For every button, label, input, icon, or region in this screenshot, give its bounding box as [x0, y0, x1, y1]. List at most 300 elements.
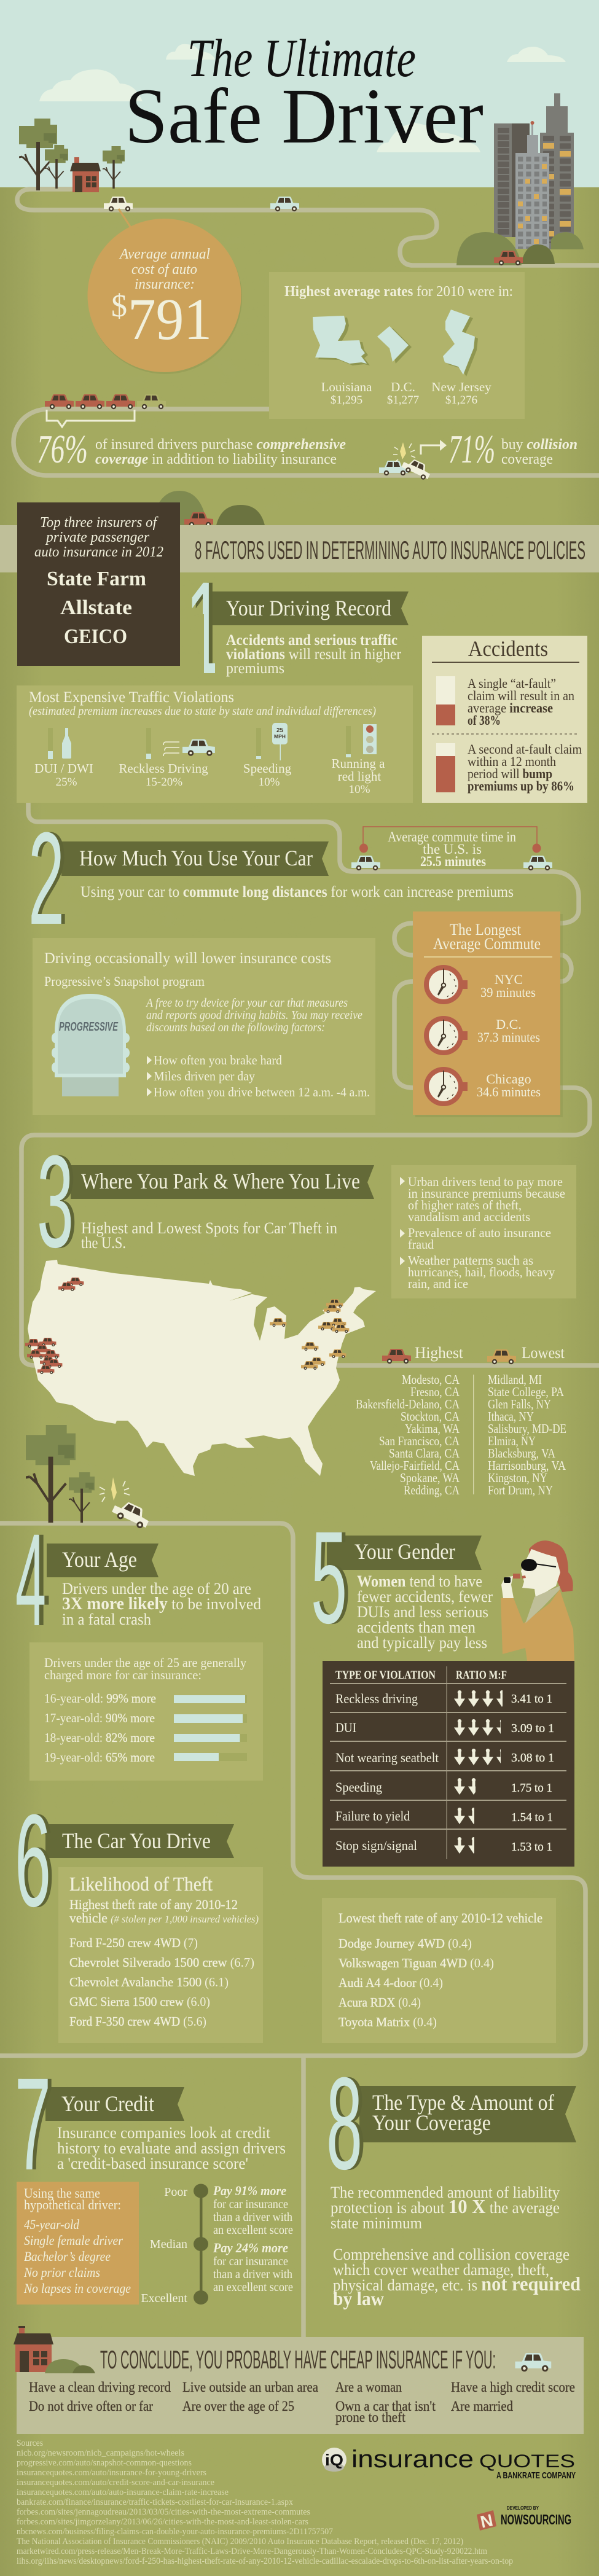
note: poor score — [213, 2183, 293, 2237]
section banner: 8 factors — [0, 525, 599, 572]
list: lowest cities: Salisbury, MD-DE — [488, 1421, 566, 1436]
commute: D.C. — [424, 1016, 540, 1055]
panel: top three insurers: private passenger — [45, 529, 150, 545]
panel: top three insurers: auto insurance in 2012 — [34, 544, 163, 560]
title line: The Ultimate: The Ultimate — [187, 29, 416, 88]
violation: reckless driving — [119, 728, 215, 789]
state labels: Louisiana — [321, 380, 372, 394]
panel: top three insurers: GEICO — [64, 625, 127, 648]
conclusion list: Have a clean driving record — [29, 2379, 171, 2395]
highest theft cars — [25, 1278, 84, 1374]
note: poor score: Pay 91% more — [213, 2183, 286, 2198]
number 3: 3 — [37, 1128, 74, 1275]
list: highest theft vehicles: Chevrolet Avalanche 1500 (6.1) — [69, 1975, 229, 1989]
row: speeding — [335, 1778, 552, 1795]
list: highest cities: Vallejo-Fairfield, CA — [370, 1458, 460, 1473]
note: median score — [213, 2240, 293, 2294]
sources: insurancequotes.com/auto/credit-score-and-car-insurance — [17, 2478, 214, 2488]
list: lowest cities: State College, PA — [488, 1384, 565, 1399]
hills and car behind banner — [151, 491, 265, 528]
panel: hypothetical driver: Single female driver — [24, 2233, 123, 2248]
panel: top three insurers: Allstate — [60, 596, 132, 619]
panel: lowest theft: Lowest theft rate of any 2010-12 vehicle — [339, 1910, 542, 1926]
conclusion list: Own a car that isn't — [335, 2398, 436, 2414]
list: highest cities: Yakima, WA — [405, 1421, 460, 1436]
illustration: woman with lipstick — [501, 1540, 574, 1661]
number 8: 8 — [326, 2050, 362, 2197]
table: violation ratio by gender: TYPE OF VIOLATION — [335, 1669, 436, 1682]
stat: 76 percent comprehensive — [37, 394, 346, 472]
factor 3: where you park — [37, 1128, 374, 1275]
panel: conclusion — [14, 2326, 584, 2434]
logo: nowsourcing: DEVELOPED BY — [507, 2505, 539, 2511]
bar chart rows — [44, 1691, 247, 1765]
accident bar 1: A single “at-fault” — [468, 676, 556, 691]
factor 4: your age: 3X more likely to be involved — [62, 1594, 261, 1614]
panel: most expensive traffic violations: (estimated premium increases due to state by state and individual differences) — [29, 704, 376, 718]
text: comprehensive: which cover weather damage, theft, — [333, 2261, 549, 2279]
row: stop sign: 1.53 to 1 — [511, 1840, 552, 1854]
sources: The National Association of Insurance Commissioners (NAIC) 2009/2010 Auto Insurance Database Report, released (Dec. 17, 2012) — [17, 2537, 463, 2547]
sources: nbcnews.com/business/filing-claims-can-double-your-auto-insurance-premiums-2D11757507 — [17, 2527, 333, 2537]
logo: insurancequotes: iQ — [325, 2451, 343, 2469]
factor 2: how much you use your car: Using your car to commute long distances for work can increase premiums — [80, 884, 514, 900]
factor 5: your gender: DUIs and less serious — [357, 1603, 488, 1621]
note: poor score: for car insurance — [213, 2198, 288, 2211]
table: violation ratio by gender: RATIO M:F — [456, 1669, 507, 1682]
city skyline — [456, 93, 584, 265]
text: driving record — [226, 632, 402, 677]
violation: DUI: 25% — [56, 776, 77, 789]
row: reckless driving: 3.41 to 1 — [511, 1692, 552, 1706]
violation: speeding: Speeding — [243, 761, 292, 776]
commute: NYC — [424, 965, 536, 1004]
text: liability — [331, 2184, 560, 2232]
factor 5: your gender: accidents than men — [357, 1618, 476, 1636]
conclusion list: Are a woman — [335, 2379, 402, 2395]
accident bar 1: of 38% — [468, 712, 501, 728]
banner: where you park — [71, 1165, 374, 1199]
row: stop sign — [335, 1837, 552, 1854]
row: not wearing seatbelt: Not wearing seatbelt — [335, 1750, 439, 1765]
logo: insurancequotes: QUOTES — [479, 2451, 575, 2472]
list: highest cities: Modesto, CA — [402, 1372, 460, 1387]
panel: lowest theft — [322, 1898, 556, 2043]
number 5 — [311, 1504, 351, 1651]
list: lowest theft vehicles — [339, 1936, 494, 2029]
logo: nowsourcing — [477, 2505, 571, 2532]
road: centre dividing road — [0, 1523, 585, 2337]
note: poor score: than a driver with — [213, 2211, 292, 2224]
row: stop sign: Stop sign/signal — [335, 1838, 417, 1853]
factor 2: how much you use your car — [28, 805, 514, 952]
factor list: How often you brake hard — [154, 1053, 282, 1067]
sources: insurancequotes.com/auto/auto-insurance-claim-rate-increase — [17, 2488, 229, 2497]
panel: hypothetical driver — [17, 2182, 139, 2305]
number 3 — [37, 1128, 77, 1275]
factor 5: your gender: fewer accidents, fewer — [357, 1588, 493, 1606]
violation: running a red light: 10% — [349, 783, 370, 796]
number 2 — [28, 805, 68, 952]
icon: car — [515, 2353, 551, 2371]
map: united states with theft markers — [25, 1260, 376, 1476]
list: highest cities: Bakersfield-Delano, CA — [356, 1397, 460, 1411]
banner: your gender: Your Gender — [354, 1539, 455, 1564]
sources — [17, 2438, 513, 2566]
panel: longest average commute: The Longest — [450, 921, 522, 939]
list: lowest theft vehicles: Toyota Matrix (0.4) — [339, 2015, 437, 2029]
list: highest cities — [356, 1372, 460, 1497]
commute: Chicago: Chicago — [486, 1071, 531, 1087]
list: lowest theft vehicles: Acura RDX (0.4) — [339, 1995, 421, 2010]
clouds — [39, 44, 566, 152]
state labels: $1,276 — [445, 394, 477, 407]
number 6 — [15, 1787, 55, 1934]
note: median score: than a driver with — [213, 2268, 292, 2281]
panel: urban driver notes: Prevalence of auto insurance — [408, 1225, 551, 1240]
banner: the car you drive: The Car You Drive — [62, 1829, 211, 1853]
panel: age bar chart: Drivers under the age of 25 are generally — [44, 1655, 246, 1670]
panel: hypothetical driver: Bachelor’s degree — [24, 2249, 111, 2264]
panel: driving occasionally: Progressive’s Snapshot program — [44, 974, 205, 989]
stat: 71 percent collision: coverage — [501, 451, 553, 467]
banner: your driving record: Your Driving Record — [226, 596, 391, 620]
number 1: 1 — [189, 555, 227, 701]
banner: your age: Your Age — [62, 1547, 137, 1572]
logo: insurancequotes — [322, 2446, 576, 2481]
list: lowest cities: Harrisonburg, VA — [488, 1458, 566, 1473]
number 2: 2 — [28, 805, 65, 952]
factor 5: your gender: and typically pay less — [357, 1634, 487, 1652]
description text: discounts based on the following factors: — [146, 1021, 325, 1034]
banner: your gender — [327, 1536, 482, 1570]
violation: speeding: MPH — [274, 733, 286, 740]
violation: DUI: DUI / DWI — [34, 761, 93, 776]
sources: marketwired.com/press-release/Men-Break-More-Traffic-Laws-Drive-More-Dangerously-Than-Women-Concludes-QPC-Study-920022.htm — [17, 2547, 487, 2556]
banner: type and amount: The Type & Amount of — [372, 2090, 554, 2115]
legend and city lists — [356, 1344, 566, 1497]
conclusion list: Have a high credit score — [451, 2379, 575, 2395]
icon: progressive snapshot device: PROGRESSIVE — [59, 1020, 118, 1034]
description text: A free to try device for your car that measures — [145, 996, 348, 1010]
panel: hypothetical driver: hypothetical driver: — [24, 2197, 121, 2212]
list: lowest theft vehicles: Dodge Journey 4WD (0.4) — [339, 1936, 472, 1951]
sources: iihs.org/iihs/news/desktopnews/ford-f-250-has-highest-theft-rate-of-any-2010-12-vehicle-cadillac-escalade-drops-to-6th-on-list-after-years-on-top — [17, 2556, 513, 2566]
panel: urban driver notes: fraud — [408, 1237, 434, 1252]
commute: D.C.: 37.3 minutes — [477, 1029, 540, 1045]
factor 7: your credit — [15, 2051, 286, 2198]
bar chart rows: 19-year-old: 65% more — [44, 1750, 155, 1765]
sources: progressive.com/auto/snapshot-common-questions — [17, 2458, 192, 2468]
factor 1: your driving record — [192, 582, 409, 677]
stat: 76 percent comprehensive: coverage in addition to liability insurance — [95, 451, 337, 467]
violation: speeding: 10% — [259, 776, 280, 789]
conclusion list: prone to theft — [335, 2410, 406, 2425]
callout: average annual cost: cost of auto — [131, 262, 197, 278]
heading: highest rates: Highest average rates for 2010 were in: — [284, 284, 513, 300]
panel: top three insurers — [17, 502, 180, 666]
violation: speeding — [243, 723, 292, 789]
panel: urban driver notes: vandalism and accidents — [408, 1209, 530, 1224]
panel: hypothetical driver: No lapses in coverage — [23, 2281, 131, 2296]
accident bar 2: period will bump — [468, 766, 552, 781]
factor list: How often you drive between 12 a.m. -4 a.m. — [154, 1085, 370, 1099]
panel: longest average commute: Average Commute — [433, 935, 541, 953]
title — [125, 29, 484, 160]
factor 4: your age — [15, 1507, 261, 1653]
banner: how much: How Much You Use Your Car — [79, 846, 313, 870]
panel: hypothetical driver: No prior claims — [23, 2265, 100, 2280]
note: median score: for car insurance — [213, 2255, 288, 2268]
row: failure to yield: Failure to yield — [335, 1808, 410, 1824]
list: highest cities: Stockton, CA — [401, 1409, 460, 1424]
panel: longest average commute — [413, 911, 563, 1117]
factor 6: the car you drive — [15, 1787, 234, 1934]
panel: driving occasionally: Driving occasionally will lower insurance costs — [44, 950, 331, 967]
violation: running a red light: Running a — [332, 756, 385, 771]
panel: hypothetical driver: Using the same — [24, 2185, 100, 2201]
violation: speeding: 25 — [276, 727, 283, 734]
list: lowest cities: Glen Falls, NY — [488, 1397, 551, 1411]
text: comprehensive — [333, 2246, 581, 2309]
list: lowest cities: Fort Drum, NY — [488, 1483, 553, 1497]
logo: insurancequotes: insurance — [351, 2446, 474, 2473]
accident bar 2: premiums up by 86% — [468, 778, 574, 794]
panel: urban driver notes: in insurance premiums because — [408, 1186, 565, 1201]
panel: urban driver notes: rain, and ice — [408, 1276, 468, 1291]
factor 4: your age: Drivers under the age of 20 are — [62, 1580, 251, 1598]
panel: highest theft — [58, 1867, 263, 2043]
factor 5: your gender: 5 — [315, 1504, 351, 1651]
row: DUI: 3.09 to 1 — [511, 1722, 554, 1735]
banner: type and amount: Your Coverage — [372, 2110, 491, 2135]
list: highest theft vehicles: Chevrolet Silverado 1500 crew (6.7) — [69, 1955, 254, 1970]
callout: average annual cost — [87, 209, 242, 374]
conclusion list: Do not drive often or far — [29, 2398, 153, 2414]
row: not wearing seatbelt: 3.08 to 1 — [511, 1751, 554, 1765]
stat: 71 percent collision: buy collision — [501, 437, 577, 453]
panel: accidents: Accidents — [468, 636, 548, 661]
text: comprehensive: by law — [333, 2287, 384, 2309]
factor 2: how much you use your car: 2 — [32, 805, 68, 952]
factor 5: your gender — [311, 1504, 493, 1652]
road: top winding road — [17, 189, 599, 265]
commute: D.C.: D.C. — [496, 1017, 522, 1032]
commute: Chicago — [424, 1067, 541, 1106]
logo: nowsourcing: N — [479, 2510, 495, 2532]
list: lowest cities: Blacksburg, VA — [488, 1446, 556, 1461]
violation: running a red light: red light — [338, 769, 381, 784]
list: highest cities: Fresno, CA — [410, 1384, 460, 1399]
factor 7: your credit: history to evaluate and assign drivers — [57, 2139, 286, 2157]
description text — [145, 996, 362, 1034]
factor list — [147, 1053, 370, 1099]
number 3: 3 — [41, 1128, 77, 1275]
commute: NYC: 39 minutes — [480, 985, 536, 1000]
row: reckless driving: Reckless driving — [335, 1691, 418, 1706]
accident bar 2: within a 12 month — [468, 754, 556, 769]
list: highest cities: Redding, CA — [404, 1483, 460, 1497]
panel: highest theft: Likelihood of Theft — [69, 1873, 213, 1895]
sources: forbes.com/sites/jennagoudreau/2013/03/05/cities-with-the-most-extreme-commutes — [17, 2507, 310, 2517]
icon: progressive snapshot device — [52, 994, 130, 1096]
banner: your age — [47, 1544, 159, 1577]
panel: urban driver notes: of higher rates of theft, — [408, 1198, 522, 1212]
factor 7: your credit: a 'credit-based insurance score' — [57, 2155, 248, 2172]
commute: NYC: NYC — [495, 972, 523, 987]
factor 7: your credit: Insurance companies look at credit — [57, 2124, 271, 2142]
accident bar 1: average increase — [468, 700, 553, 716]
callout: average annual cost: $ — [111, 289, 127, 324]
chart: credit score scale: Poor — [164, 2185, 187, 2199]
banner: your credit — [45, 2087, 184, 2121]
accident bar 2 — [436, 741, 582, 794]
sources: insurancequotes.com/auto/insurance-for-young-drivers — [17, 2468, 206, 2478]
bar chart rows: 18-year-old: 82% more — [44, 1730, 155, 1745]
panel: accidents — [422, 636, 587, 803]
row: not wearing seatbelt — [335, 1749, 554, 1765]
number 7 — [15, 2051, 55, 2198]
banner: type and amount — [359, 2086, 576, 2142]
factor 6: the car you drive: 6 — [18, 1787, 55, 1934]
callout: average commute: 25.5 minutes — [420, 854, 486, 869]
panel: most expensive traffic violations: Most Expensive Traffic Violations — [29, 689, 234, 706]
sources: bankrate.com/finance/insurance/traffic-tickets-costliest-for-car-insurance-1.aspx — [17, 2497, 293, 2507]
factor 3: where you park: Highest and Lowest Spots for Car Theft in — [81, 1219, 337, 1237]
row: failure to yield: 1.54 to 1 — [511, 1811, 553, 1824]
accident bar 1 — [436, 676, 574, 728]
stat: 76 percent comprehensive: of insured drivers purchase comprehensive — [95, 437, 346, 453]
state labels: D.C. — [391, 380, 415, 394]
list: lowest theft vehicles: Volkswagen Tiguan 4WD (0.4) — [339, 1956, 494, 1970]
note: poor score: an excellent score — [213, 2223, 293, 2237]
accident bar 2: A second at-fault claim — [468, 741, 582, 757]
state labels: New Jersey — [431, 380, 491, 394]
list: highest cities: Santa Clara, CA — [389, 1446, 460, 1461]
panel: highest average rates — [269, 272, 525, 419]
text: comprehensive: Comprehensive and collision coverage — [333, 2246, 570, 2263]
conclusion list — [29, 2379, 575, 2425]
list: lowest cities: Kingston, NY — [488, 1470, 547, 1485]
table: violation ratio by gender — [323, 1661, 574, 1867]
row: DUI: DUI — [335, 1720, 356, 1735]
number 4 — [15, 1507, 50, 1653]
note: median score: Pay 24% more — [213, 2240, 288, 2255]
panel: highest theft: vehicle (# stolen per 1,000 insured vehicles) — [69, 1910, 259, 1926]
house and trees — [19, 119, 125, 192]
factor 4: your age: 4 — [20, 1507, 50, 1653]
callout: average commute: the U.S. is — [423, 841, 482, 857]
road: from violations panel to commute — [22, 798, 599, 1365]
bar chart rows: 16-year-old: 99% more — [44, 1691, 156, 1706]
chart: credit score scale: Excellent — [141, 2292, 187, 2305]
text: liability: protection is about 10 X the average — [331, 2195, 560, 2217]
tree crash scene — [26, 1425, 152, 1531]
row: speeding: Speeding — [335, 1779, 382, 1795]
factor list: Miles driven per day — [154, 1069, 255, 1083]
factor 8: type and amount of coverage — [326, 2050, 581, 2309]
callout: average commute — [351, 827, 552, 870]
list: highest theft vehicles — [69, 1935, 254, 2029]
banner: your driving record — [211, 591, 409, 625]
list: lowest cities: Ithaca, NY — [488, 1409, 534, 1424]
callout: average annual cost: Average annual — [119, 246, 210, 262]
stat: 76 percent comprehensive: 76% — [37, 427, 88, 472]
commute: Chicago: 34.6 minutes — [477, 1084, 541, 1099]
list: lowest cities: Elmira, NY — [488, 1434, 536, 1448]
lowest theft cars — [270, 1299, 349, 1370]
panel: driving occasionally — [33, 938, 375, 1115]
violation: reckless driving: 15-20% — [146, 776, 182, 789]
list: lowest theft vehicles: Audi A4 4-door (0.4) — [339, 1975, 443, 1990]
banner: your credit: Your Credit — [61, 2091, 154, 2116]
number 8 — [326, 2050, 366, 2197]
stat: 71 percent collision — [379, 427, 577, 482]
text: driving record: Accidents and serious traffic — [226, 632, 397, 649]
road: lower loop — [14, 409, 599, 475]
violation: reckless driving: Reckless Driving — [119, 761, 208, 776]
bar chart rows: 17-year-old: 90% more — [44, 1711, 155, 1725]
violation: running a red light — [332, 724, 385, 796]
callout: average commute: Average commute time in — [388, 829, 516, 845]
factor 4: your age: 4 — [15, 1507, 46, 1653]
accident bar 1: claim will result in an — [468, 688, 574, 703]
stat: 71 percent collision: 71% — [448, 427, 495, 472]
banner: how much — [61, 841, 329, 876]
text: liability: state minimum — [331, 2214, 422, 2232]
list: highest cities: Spokane, WA — [400, 1470, 460, 1485]
number 1: 1 — [186, 555, 224, 701]
list: lowest cities — [488, 1372, 566, 1497]
sources: Sources — [17, 2438, 43, 2448]
legend and city lists: Lowest — [522, 1344, 565, 1362]
panel: age bar chart: charged more for car insurance: — [44, 1668, 202, 1682]
callout: average annual cost: 791 — [128, 286, 212, 352]
text: driving record: premiums — [226, 660, 284, 677]
panel: urban driver notes: Weather patterns such as — [408, 1253, 533, 1268]
panel: urban driver notes: hurricanes, hail, floods, heavy — [408, 1265, 555, 1279]
factor 3: where you park: the U.S. — [81, 1234, 126, 1252]
chart: credit score scale: Median — [150, 2238, 187, 2251]
row: reckless driving — [335, 1690, 552, 1707]
panel: top three insurers: Top three insurers of — [40, 515, 159, 531]
icon: house with hills — [14, 2326, 95, 2373]
panel: age bar chart — [29, 1642, 263, 1781]
legend and city lists: Highest — [415, 1344, 464, 1362]
panel: top three insurers: State Farm — [47, 568, 146, 590]
row: DUI — [335, 1719, 554, 1736]
factor 7: your credit: 7 — [18, 2051, 55, 2198]
list: lowest cities: Midland, MI — [488, 1372, 542, 1387]
conclusion list: Are over the age of 25 — [182, 2398, 294, 2414]
title line: Safe Driver: Safe Driver — [125, 72, 484, 160]
factor 5: your gender: Women tend to have — [357, 1572, 482, 1590]
factor 4: your age: in a fatal crash — [62, 1610, 151, 1628]
conclusion list: Live outside an urban area — [182, 2379, 318, 2395]
number 1 — [192, 582, 215, 673]
sources: nicb.org/newsroom/nicb_campaigns/hot-wheels — [17, 2448, 184, 2458]
list: highest theft vehicles: Ford F-250 crew 4WD (7) — [69, 1935, 198, 1950]
chart: credit score scale — [141, 2183, 293, 2305]
panel: urban driver notes — [391, 1165, 576, 1298]
text: comprehensive: physical damage, etc. is not required — [333, 2273, 581, 2295]
note: median score: an excellent score — [213, 2281, 293, 2294]
list: highest cities: San Francisco, CA — [379, 1434, 460, 1448]
text: liability: The recommended amount of liability — [331, 2184, 560, 2201]
state shapes — [313, 310, 478, 377]
text: driving record: violations will result in higher — [226, 646, 402, 663]
list: highest theft vehicles: Ford F-350 crew 4WD (5.6) — [69, 2014, 206, 2029]
